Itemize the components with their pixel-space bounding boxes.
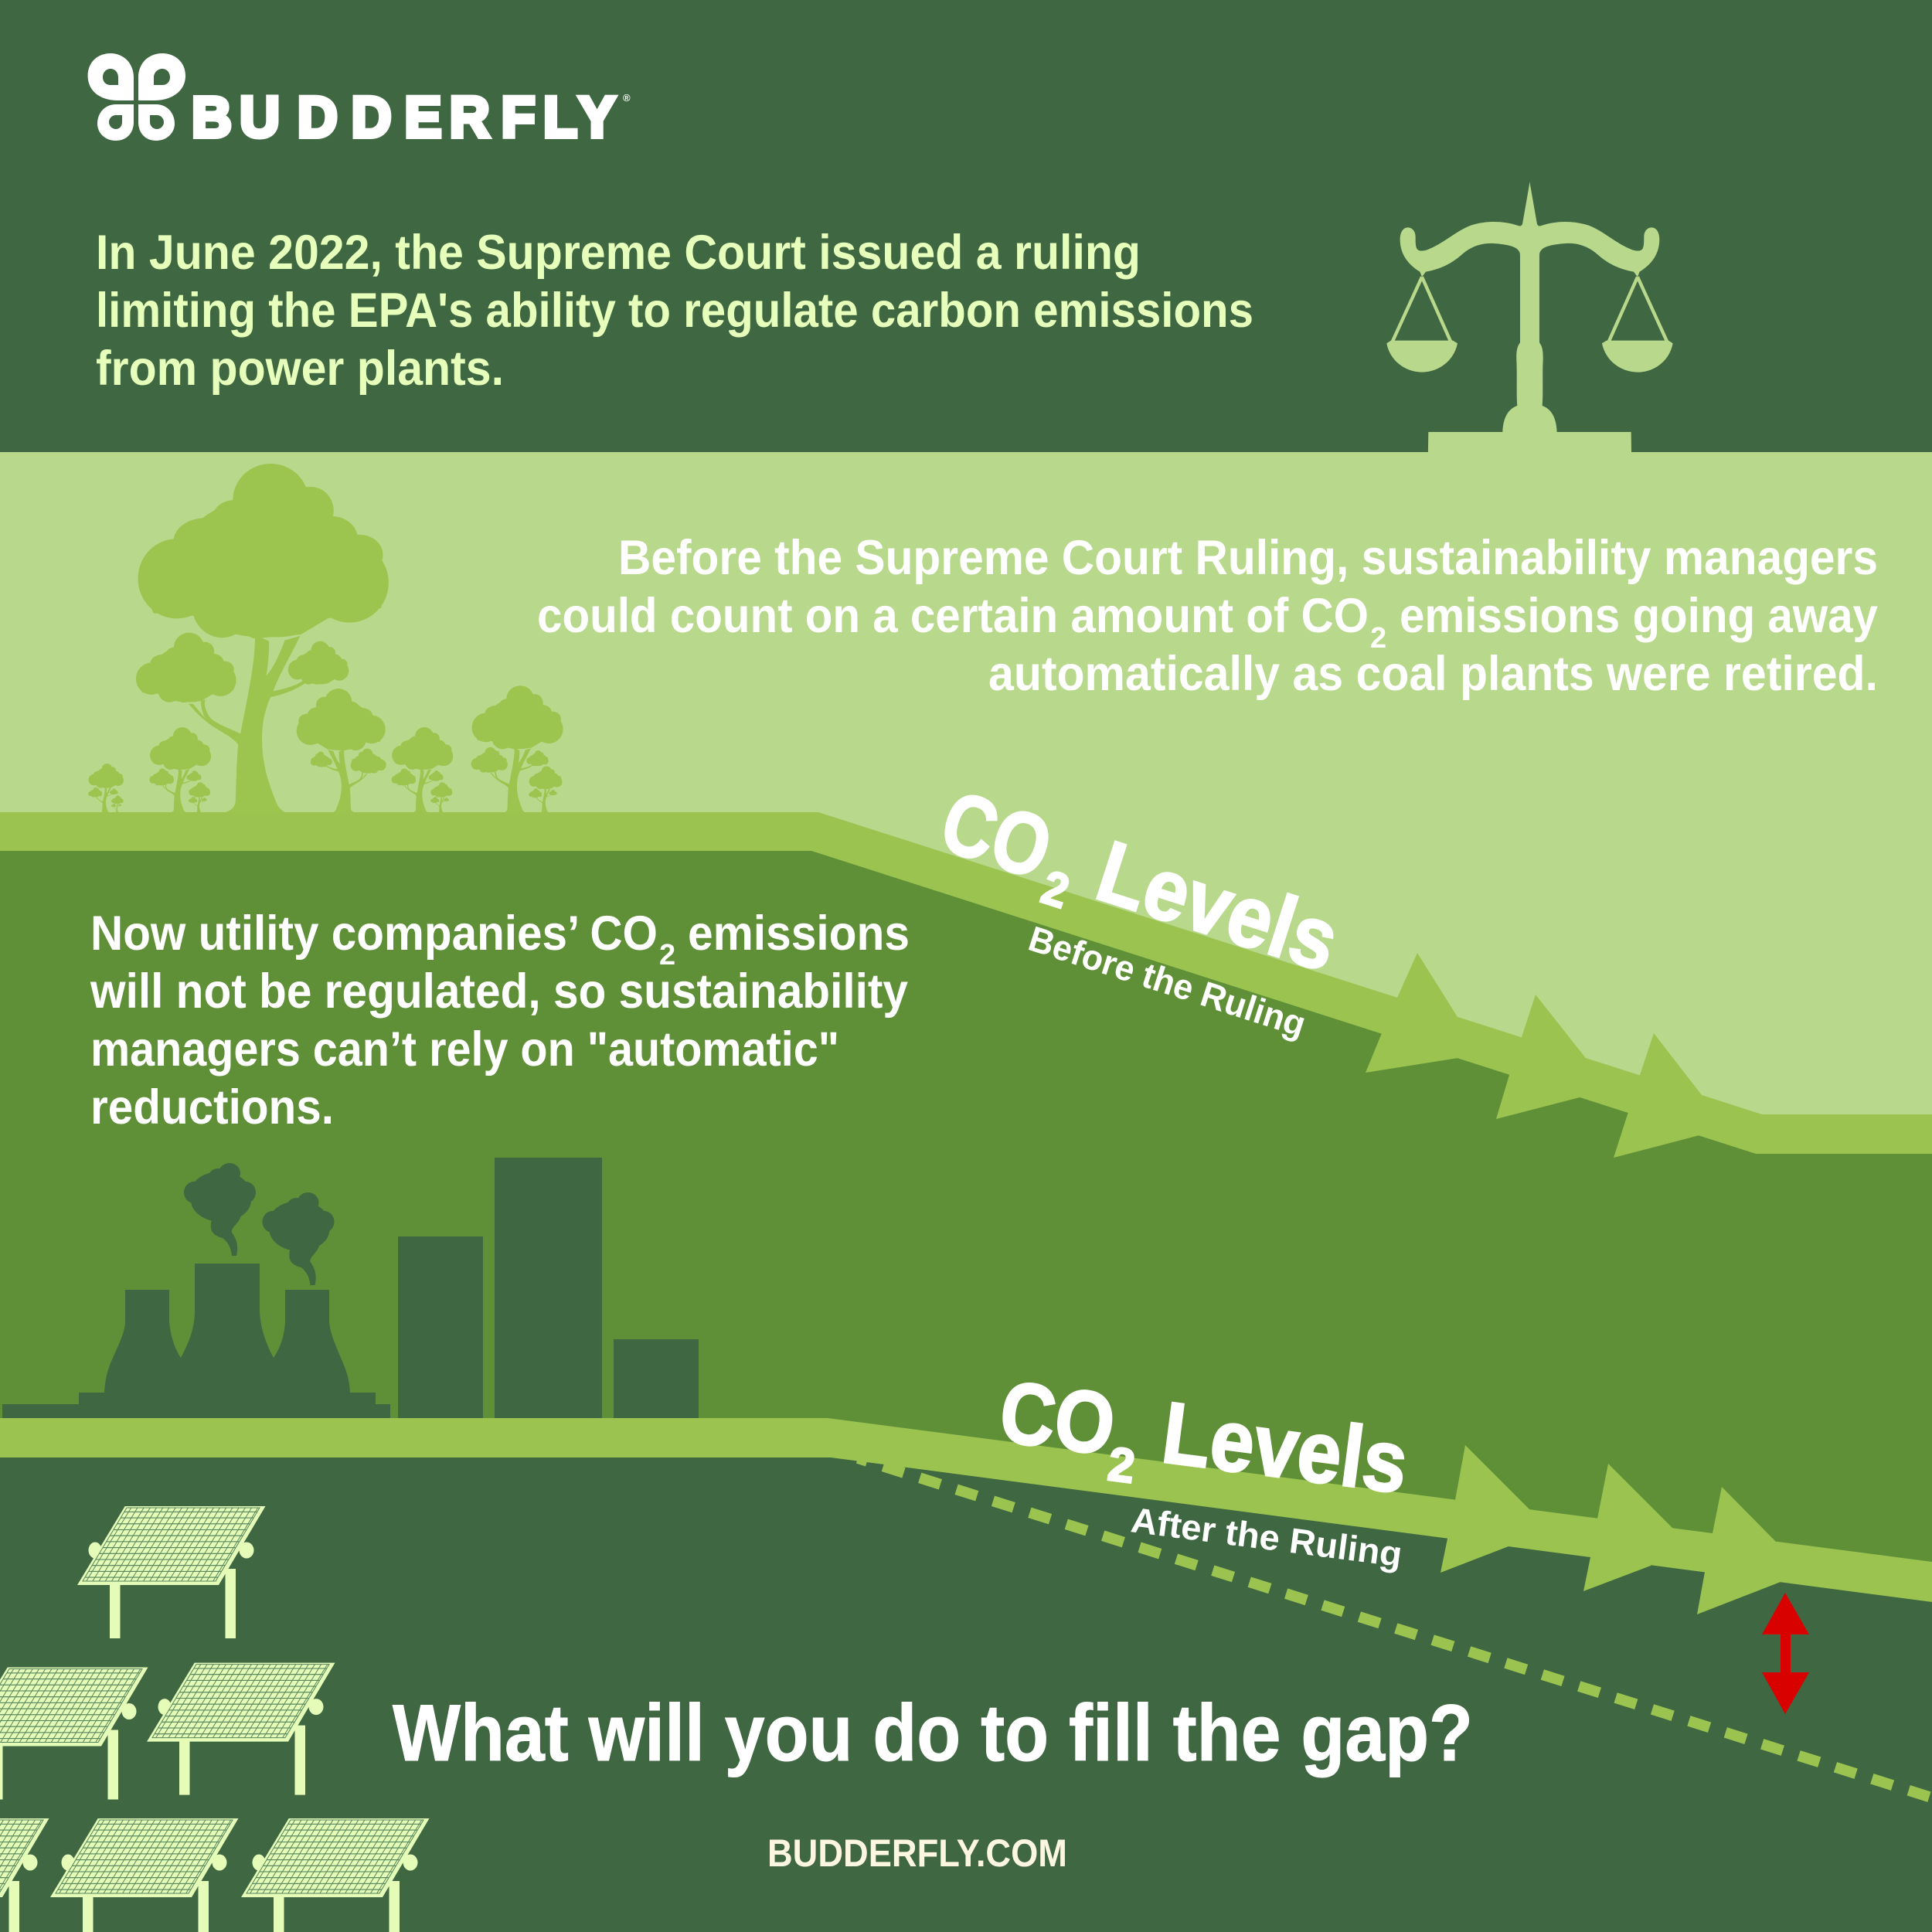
label: before the ruling: Before the Ruling (1024, 918, 1311, 1045)
ribbon: CO2 levels before the ruling (0, 812, 1932, 1158)
text: now utility companies: emissions (688, 906, 910, 961)
arrowheads (1366, 953, 1458, 1073)
right half of scale (1529, 182, 1673, 464)
text: now utility companies: Now utility companies’ CO (90, 906, 658, 961)
text: before the ruling explanation: could count on a certain amount of CO (537, 589, 1369, 643)
label: CO2 levels after the ruling: Levels (1157, 1383, 1413, 1512)
text: now utility companies (90, 906, 910, 1134)
logo (88, 53, 631, 149)
heading: call to action: What will you do to fill the gap? (393, 1689, 1473, 1778)
label: after the ruling: After the Ruling (1129, 1499, 1404, 1574)
medium trees (297, 689, 386, 813)
buildings (398, 1236, 483, 1419)
text: now utility companies: 2 (659, 939, 675, 971)
text: before the ruling explanation: automatically as coal plants were retired. (988, 647, 1878, 701)
intro text: supreme court ruling (96, 226, 1253, 396)
text: now utility companies: managers can’t rely on "automatic" (90, 1022, 839, 1077)
logo wordmark: BUDDERFLY (192, 86, 615, 149)
intro text: supreme court ruling: from power plants. (96, 342, 504, 396)
label: CO2 levels after the ruling: 2 (1105, 1437, 1138, 1494)
background: light green band (0, 452, 1932, 1225)
label: CO2 levels before the ruling: 2 (1036, 861, 1075, 919)
background: dark top band (0, 0, 1932, 464)
illustration: solar panels (0, 1506, 430, 1932)
dashed line: projected CO2 trajectory (858, 1458, 1932, 1803)
intro text: supreme court ruling: In June 2022, the Supreme Court issued a ruling (96, 226, 1141, 280)
arrowheads (1440, 1445, 1530, 1573)
background: dark bottom band (0, 1445, 1932, 1932)
label: CO2 levels before the ruling (927, 772, 1350, 1002)
text: before the ruling explanation: emissions going away (1400, 589, 1878, 643)
smoke plumes (184, 1163, 256, 1256)
text: before the ruling explanation: Before the Supreme Court Ruling, sustainability managers (618, 531, 1878, 585)
background: mid green band (0, 842, 1932, 1592)
illustration: factory and buildings (2, 1158, 699, 1419)
text: before the ruling explanation (537, 531, 1878, 701)
website url: BUDDERFLY.COM (767, 1832, 1067, 1875)
text: now utility companies: reductions. (90, 1080, 334, 1134)
text: before the ruling explanation: 2 (1370, 622, 1386, 655)
text: now utility companies: will not be regulated, so sustainability (90, 964, 908, 1019)
small trees (529, 766, 562, 812)
label: CO2 levels after the ruling: CO (995, 1362, 1121, 1474)
icon: scales of justice (1386, 182, 1673, 464)
label: CO2 levels after the ruling (992, 1362, 1413, 1529)
registered mark: ® (623, 92, 631, 104)
label: CO2 levels before the ruling: CO (930, 772, 1063, 898)
intro text: supreme court ruling: limiting the EPA's ability to regulate carbon emissions (96, 284, 1253, 338)
icon: butterfly mark (88, 53, 185, 141)
illustration: trees (88, 464, 563, 814)
label: CO2 levels before the ruling: Levels (1087, 822, 1350, 990)
large tree (136, 464, 389, 814)
ribbon: CO2 levels after the ruling (0, 1418, 1932, 1614)
icon: red gap arrow (1762, 1593, 1809, 1714)
left half of scale (1386, 182, 1530, 464)
cooling towers (2, 1264, 390, 1418)
